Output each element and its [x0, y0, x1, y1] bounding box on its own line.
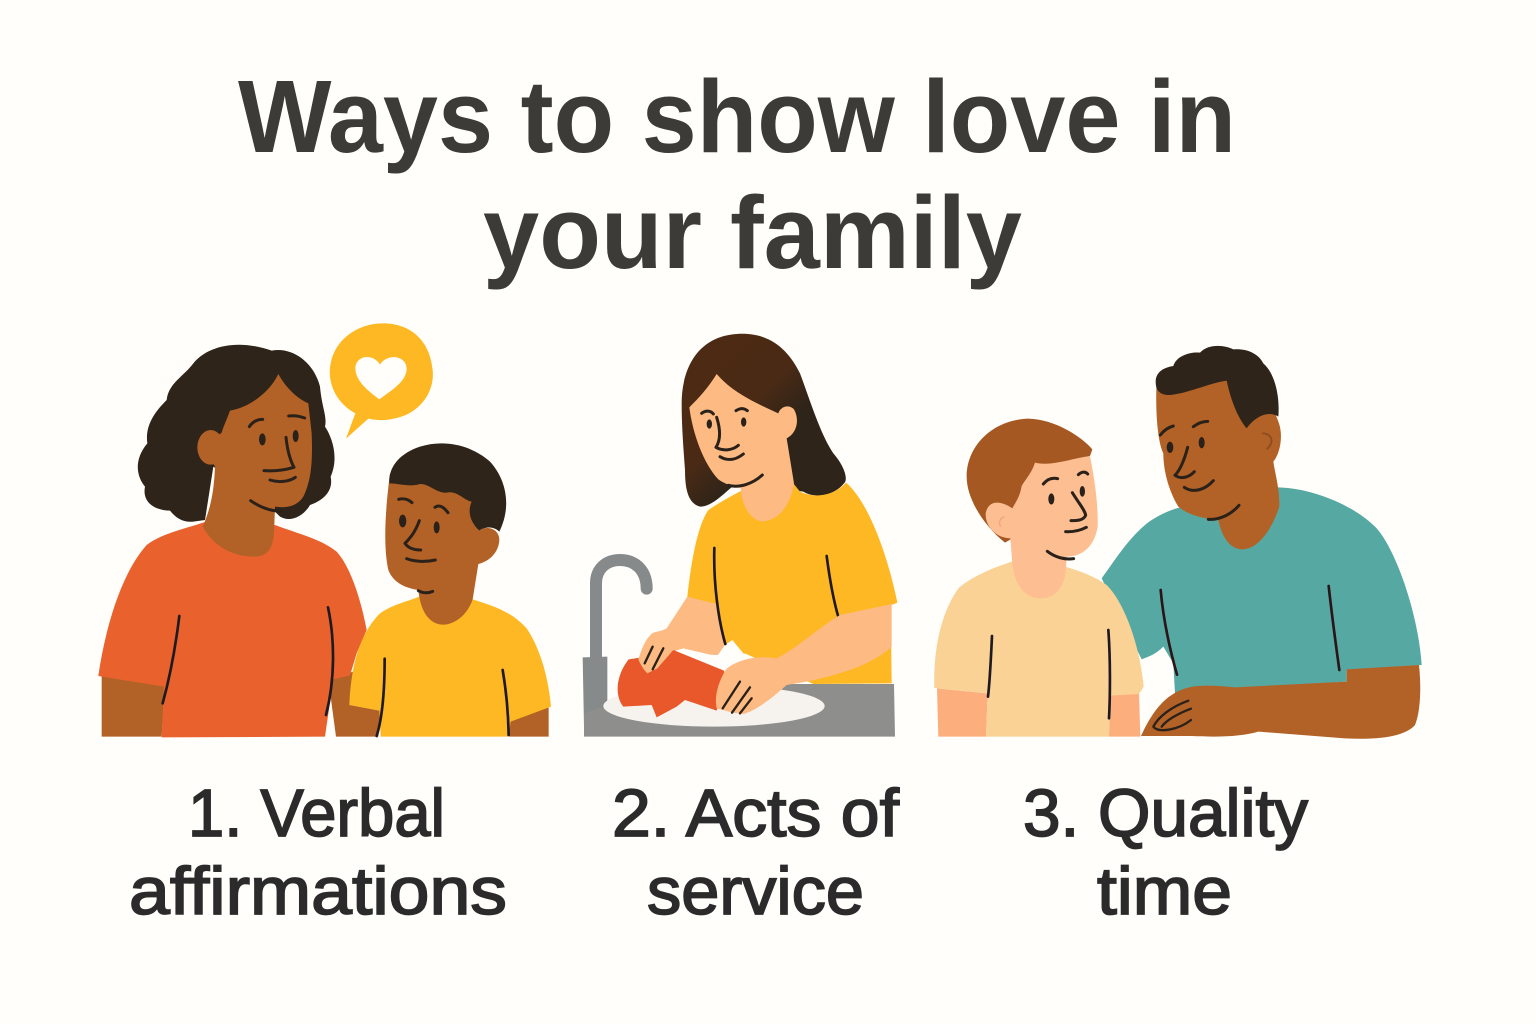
- speech bubble with heart: [330, 323, 433, 439]
- man in teal shirt: [1102, 346, 1422, 739]
- label: quality time: time: [1097, 854, 1232, 929]
- panel: verbal affirmations illustration: [98, 323, 551, 737]
- panel: quality time illustration: [934, 346, 1422, 739]
- woman in orange shirt: [98, 345, 380, 737]
- label: verbal affirmations: 1. Verbal: [188, 776, 445, 851]
- label: quality time: [1023, 776, 1308, 929]
- label: acts of service: service: [647, 854, 864, 929]
- woman in yellow shirt: [642, 334, 897, 684]
- faucet: [583, 560, 647, 727]
- red cloth and hands: [618, 604, 892, 717]
- title: Ways to show love in: [238, 59, 1236, 174]
- label: verbal affirmations: affirmations: [129, 854, 507, 929]
- title: your family: [483, 175, 1022, 290]
- label: acts of service: [612, 776, 899, 929]
- boy in yellow shirt: [349, 443, 551, 737]
- label: verbal affirmations: [129, 776, 507, 929]
- label: acts of service: 2. Acts of: [612, 776, 899, 851]
- title: [238, 59, 1236, 290]
- boy in cream shirt: [934, 419, 1144, 737]
- panel: acts of service illustration: [583, 334, 897, 737]
- sink counter: [584, 684, 895, 737]
- label: quality time: 3. Quality: [1023, 776, 1308, 851]
- plate: [603, 685, 825, 727]
